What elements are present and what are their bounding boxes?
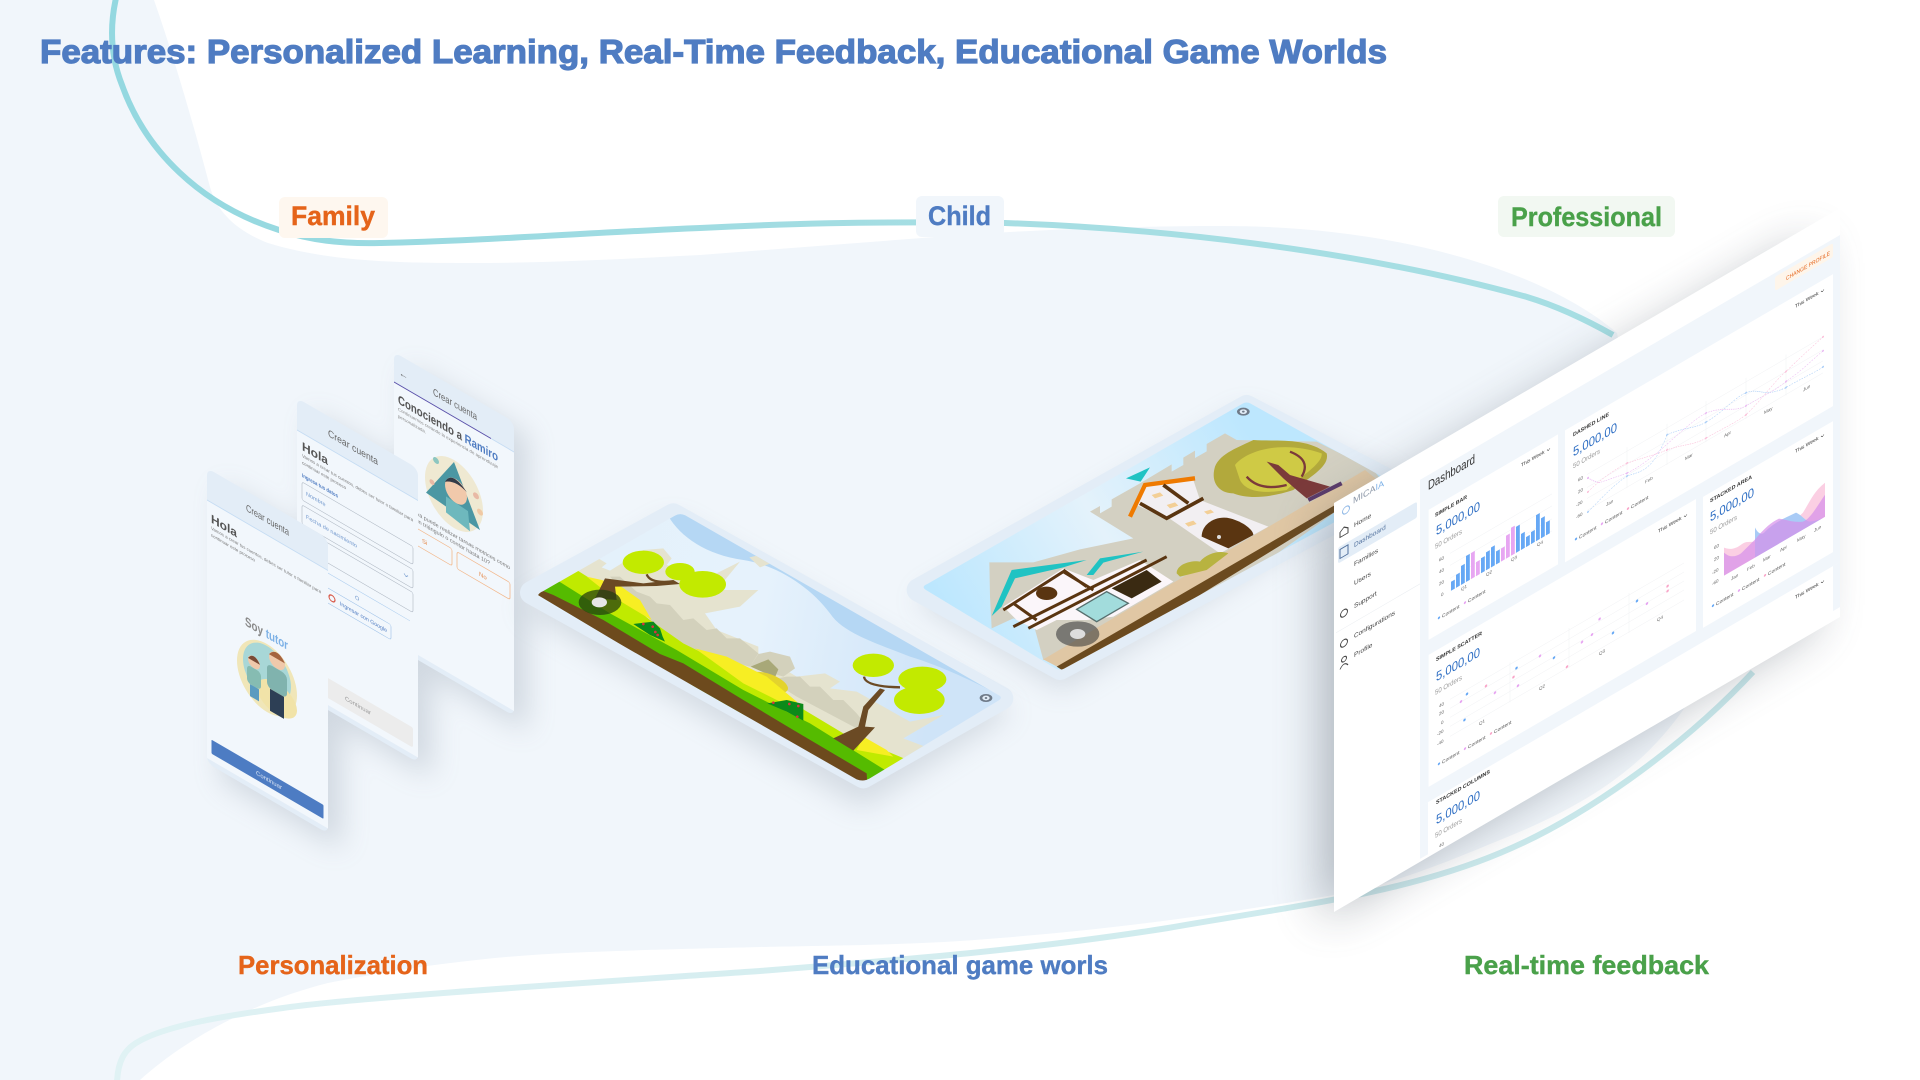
card: simple scatter: SIMPLE SCATTER	[1436, 631, 1483, 663]
card: simple scatter: Content	[1494, 720, 1512, 736]
phone 1: Soy tutor	[207, 468, 328, 834]
card: simple bar: 40	[1439, 567, 1444, 576]
title: Features: Personalized Learning, Real-Time Feedback, Educational Game Worlds	[40, 33, 1387, 70]
card: dashed line: 5,000,00	[1573, 419, 1617, 459]
card: dashed line: Mar	[1685, 452, 1693, 462]
card: simple scatter: 0	[1441, 719, 1444, 726]
card: stacked area: 60	[1714, 543, 1719, 551]
card: stacked columns: 50 Orders	[1435, 816, 1462, 840]
card: stacked area: Mar	[1763, 553, 1771, 564]
phone 3: Conociendo a Ramiro: dibujar un triángulo o contar hasta 10?	[398, 508, 491, 567]
card: stacked area: Jan	[1731, 572, 1739, 582]
card: simple bar: 0	[1441, 591, 1444, 598]
phone 2: Hola form: Nombre	[306, 492, 326, 509]
sidebar: Users	[1354, 571, 1371, 587]
sidebar: Configurations	[1354, 610, 1395, 640]
label: Educational game worls: Educational game worls	[812, 950, 1108, 980]
card: stacked area: -20	[1712, 567, 1719, 576]
phone 1: Soy tutor: continuar este proceso	[211, 533, 255, 564]
phone 2: Hola form: Continuar	[345, 695, 372, 717]
card: simple scatter: Q4	[1657, 614, 1663, 624]
card: simple bar: 60	[1439, 555, 1444, 564]
card: stacked area: STACKED AREA	[1710, 474, 1753, 505]
card: dashed line: -20	[1576, 499, 1583, 509]
phone 3: Conociendo a Ramiro: Si	[422, 538, 427, 547]
phone 1: Soy tutor: Crear cuenta	[246, 502, 289, 539]
card: simple bar: Q4	[1537, 539, 1543, 549]
sidebar: Dashboard	[1354, 524, 1386, 549]
card: dashed line: Jan	[1606, 498, 1614, 508]
card: dashed line: 20	[1578, 487, 1583, 496]
sidebar: Profile	[1354, 642, 1372, 659]
dashboard sheet	[1334, 208, 1840, 912]
sidebar: Support	[1354, 590, 1377, 610]
phone 2: Hola form: Ingresar con Google	[340, 601, 388, 635]
phone 2: Hola form: Vamos a crear tus cuentos, debes ser tutor o familiar para	[302, 453, 413, 524]
phone 2: Hola form: Ingresa tus datos	[302, 473, 339, 500]
phone 3: Conociendo a Ramiro: Crear cuenta	[433, 386, 477, 423]
card: stacked area: 5,000,00	[1710, 484, 1754, 525]
phone 3: Conociendo a Ramiro: Conociendo a Ramiro	[398, 392, 498, 464]
card: simple bar: SIMPLE BAR	[1435, 494, 1468, 519]
card: simple bar: 20	[1439, 579, 1444, 588]
card: simple bar: Content	[1442, 604, 1460, 620]
change profile tag	[1775, 243, 1833, 291]
phone 2: Hola form: Hola	[302, 439, 329, 468]
top teal curve	[112, 0, 1613, 335]
card: simple scatter: Content	[1442, 750, 1460, 766]
phone shadows	[221, 366, 528, 850]
card: simple bar: 5,000,00	[1436, 498, 1480, 538]
card: stacked columns: This Week	[1795, 582, 1819, 601]
card: stacked area: Apr	[1780, 544, 1787, 554]
card: simple scatter: -40	[1437, 738, 1444, 748]
tablet 1: green game world	[520, 504, 1013, 788]
phone 3: Conociendo a Ramiro: ←	[399, 368, 408, 383]
card: simple scatter: This Week	[1658, 516, 1682, 535]
phone 3: Conociendo a Ramiro: No	[479, 571, 487, 582]
phone 3: Conociendo a Ramiro: personalizada.	[398, 414, 426, 436]
tablet 1 shadow	[520, 520, 1013, 808]
phone 2: Hola form: Crear cuenta	[328, 428, 378, 468]
card: dashed line: This Week	[1795, 291, 1819, 310]
phone 1: Soy tutor: Hola	[211, 511, 238, 541]
card: simple scatter: -20	[1437, 728, 1444, 738]
card: stacked area: Content	[1742, 577, 1760, 593]
card: simple scatter: Content	[1468, 735, 1486, 751]
phone 3: Conociendo a Ramiro: Continuemos creando la experiencia de aprendizaje	[398, 407, 498, 471]
card: simple bar: This Week	[1521, 449, 1545, 469]
tablet 2: castle game world	[907, 395, 1380, 680]
card: stacked columns	[1435, 575, 1824, 852]
card: dashed line: 50 Orders	[1573, 446, 1600, 471]
card: dashed line: Jun	[1803, 383, 1811, 393]
card: simple scatter: Q3	[1599, 648, 1605, 657]
phone 3: Conociendo a Ramiro: Ramiro ya puede realizar tareas motrices como	[398, 501, 511, 572]
card: stacked columns: 5,000,00	[1436, 787, 1480, 827]
card: simple scatter: 40	[1439, 701, 1444, 710]
card: dashed line: DASHED LINE	[1573, 412, 1609, 439]
phone 2: Hola form: continuar este proceso	[302, 460, 346, 492]
label: Real-time feedback: Real-time feedback	[1464, 950, 1710, 980]
card: stacked area: This Week	[1795, 436, 1819, 455]
phone 2: Hola form: Fecha de nacimiento	[306, 515, 358, 550]
card: dashed line: Content	[1579, 525, 1597, 541]
heading: Dashboard: Dashboard	[1428, 451, 1475, 493]
tablet 2 shadow	[915, 410, 1400, 690]
card: dashed line: Feb	[1645, 475, 1653, 486]
card: dashed line: -60	[1576, 511, 1583, 521]
card: stacked columns: 40	[1439, 841, 1444, 850]
card: stacked area: Content	[1716, 592, 1734, 608]
card: simple bar: Q3	[1511, 554, 1517, 564]
card: stacked area: May	[1797, 533, 1806, 544]
change profile tag: CHANGE PROFILE	[1786, 250, 1830, 282]
tag: Child	[916, 196, 1004, 237]
card: dashed line: May	[1764, 405, 1773, 416]
card: simple scatter	[1429, 499, 1696, 787]
phone 1: Soy tutor: Continuar	[256, 770, 283, 792]
sidebar: MICAIA	[1353, 478, 1384, 507]
sidebar	[1336, 457, 1420, 672]
card: simple bar: Q1	[1461, 584, 1467, 593]
phone 1: Soy tutor: Vamos a crear tus cuentos, debes ser tutor o familiar para	[211, 526, 321, 595]
card: stacked area: Content	[1768, 561, 1786, 577]
card: simple scatter: 50 Orders	[1435, 673, 1462, 697]
card: stacked area: -60	[1712, 578, 1719, 587]
card: stacked area: 50 Orders	[1710, 512, 1737, 537]
card: simple scatter: 20	[1439, 709, 1444, 718]
phone 3: Conociendo a Ramiro	[394, 352, 514, 716]
card: simple scatter: Q1	[1479, 718, 1485, 727]
dashboard shadow	[1322, 238, 1815, 920]
bottom teal curve	[117, 672, 1753, 1080]
sidebar: Home	[1354, 513, 1371, 529]
card: dashed line: 60	[1578, 475, 1583, 484]
tag: Professional	[1498, 196, 1675, 237]
card: dashed line: Content	[1605, 510, 1623, 526]
card: simple bar: 50 Orders	[1435, 527, 1462, 551]
card: simple bar: Content	[1468, 589, 1486, 605]
tag: Family: Family	[291, 201, 375, 231]
card: simple scatter: 5,000,00	[1436, 644, 1480, 684]
card: simple scatter: Q2	[1539, 683, 1545, 692]
card: stacked columns: STACKED COLUMNS	[1436, 769, 1490, 806]
card: simple bar	[1429, 434, 1558, 640]
card: simple bar: Q2	[1486, 569, 1492, 578]
phone 1: Soy tutor: Soy tutor	[245, 613, 288, 653]
phone 2: Hola form	[297, 398, 418, 763]
tag: Family	[279, 197, 388, 238]
tag: Professional: Professional	[1511, 202, 1662, 232]
card: dashed line: Content	[1631, 495, 1649, 511]
card: stacked area: Feb	[1747, 563, 1755, 573]
card: stacked area	[1703, 421, 1833, 628]
label: Personalization: Personalization	[238, 950, 428, 980]
card: dashed line: Apr	[1724, 430, 1731, 439]
card: stacked area: 20	[1714, 555, 1719, 563]
tag: Child: Child	[928, 201, 991, 231]
sidebar: Families	[1354, 547, 1379, 568]
card: stacked area: Jun	[1814, 524, 1822, 534]
phone 2: Hola form: O	[355, 595, 360, 603]
card: dashed line	[1565, 274, 1833, 562]
